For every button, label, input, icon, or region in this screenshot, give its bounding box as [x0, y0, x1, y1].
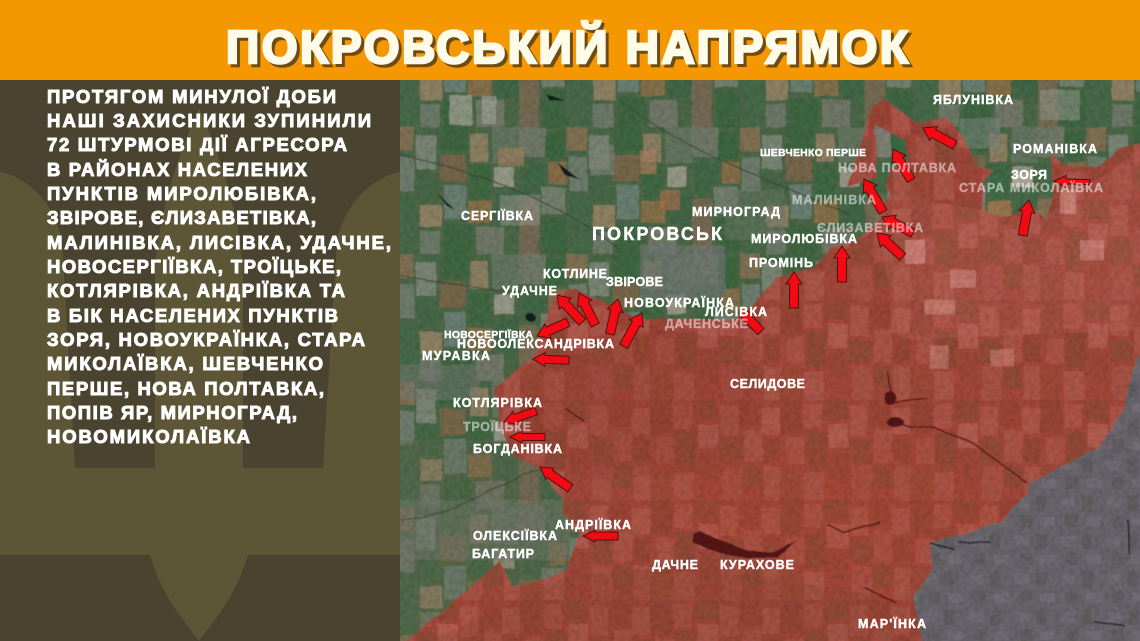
rivers on base: [400, 100, 850, 520]
body text: МАЛИНІВКА, ЛИСІВКА, УДАЧНЕ,: [47, 232, 391, 253]
label: Selydove: СЕЛИДОВЕ: [730, 377, 805, 391]
arrow: Yelyzavetivka south: [872, 227, 908, 263]
green pocket near Stara Mykolaivka: [983, 172, 1053, 220]
label: Novoserhiivka: НОВОСЕРГІЇВКА: [444, 328, 533, 341]
map base: satellite fields: [395, 75, 1140, 641]
body text: [47, 86, 391, 447]
label: Dachenske: ДАЧЕНСЬКЕ: [665, 317, 748, 331]
label: Novoukrainka: НОВОУКРАЇНКА: [624, 295, 734, 310]
label: Dachne: ДАЧНЕ: [652, 558, 698, 572]
trident emblem: [0, 108, 400, 641]
label: Marinka: МАР'ЇНКА: [858, 616, 926, 631]
label: Kurakhove: КУРАХОВЕ: [720, 558, 794, 572]
body text: ПОПІВ ЯР, МИРНОГРАД,: [47, 402, 297, 423]
arrow: Bohdanivka: [536, 461, 574, 494]
body text: ЗОРЯ, НОВОУКРАЇНКА, СТАРА: [47, 329, 365, 350]
label: Kotliarivka: КОТЛЯРІВКА: [453, 396, 542, 410]
label: Muravka: МУРАВКА: [422, 349, 490, 363]
label: Zvirove: ЗВІРОВЕ: [606, 275, 663, 289]
body text: ПУНКТІВ МИРОЛЮБІВКА,: [47, 183, 316, 204]
label: Yelyzavetivka: ЄЛИЗАВЕТІВКА: [817, 221, 923, 235]
arrow: Zvirove: [602, 297, 626, 336]
label: Stara Mykolaivka: СТАРА МИКОЛАЇВКА: [959, 180, 1103, 195]
arrow: Malynivka: [857, 175, 890, 216]
arrow: Stara Mykolaivka: [1054, 175, 1090, 188]
arrow: Novoukrainka: [617, 309, 649, 350]
body text: ПЕРШЕ, НОВА ПОЛТАВКА,: [47, 378, 324, 399]
arrow: Udachne: [551, 290, 588, 328]
terrain grain: [400, 80, 1140, 641]
arrow: Kotlyne: [572, 289, 602, 329]
left panel background: [0, 80, 400, 641]
arrow: Andriivka: [583, 530, 618, 542]
title: ПОКРОВСЬКИЙ НАПРЯМОК: [226, 21, 909, 73]
arrow: Kotliarivka: [502, 404, 538, 429]
label: Kotlyne: КОТЛИНЕ: [543, 267, 607, 281]
body text: ПРОТЯГОМ МИНУЛОЇ ДОБИ: [47, 86, 336, 107]
body text: НОВОМИКОЛАЇВКА: [47, 426, 250, 447]
label: Myroliubivka: МИРОЛЮБІВКА: [751, 232, 857, 246]
label: Troitske: ТРОЇЦЬКЕ: [463, 419, 531, 434]
label: Lysivka: ЛИСІВКА: [705, 305, 767, 319]
body text: КОТЛЯРІВКА, АНДРІЇВКА ТА: [47, 280, 345, 301]
map labels: [422, 93, 1103, 631]
arrow: Nova Poltavka: [886, 145, 918, 184]
label: Bohdanivka: БОГДАНІВКА: [473, 442, 562, 456]
body text: 72 ШТУРМОВІ ДІЇ АГРЕСОРА: [47, 134, 347, 155]
label: Oleksiivka: ОЛЕКСІЇВКА: [473, 528, 557, 543]
label: Yablunivka: ЯБЛУНІВКА: [933, 93, 1013, 107]
map: [395, 75, 1140, 641]
header bar: [0, 0, 1140, 80]
body text: В БІК НАСЕЛЕНИХ ПУНКТІВ: [47, 305, 338, 326]
red tone variation: [430, 150, 1140, 641]
label: Udachne: УДАЧНЕ: [502, 284, 557, 298]
urban gray area: [913, 345, 1140, 641]
lakes in red zone: [884, 391, 904, 427]
ravines in gray zone: [930, 520, 1130, 626]
arrow: Novooleksandrivka: [533, 352, 569, 367]
map terrain: [395, 75, 1140, 641]
arrow: Myroliubivka: [834, 246, 850, 282]
label: Zoria: ЗОРЯ: [1011, 168, 1047, 182]
label: Novooleksandrivka: НОВООЛЕКСАНДРІВКА: [457, 337, 614, 351]
arrow: Lysivka: [734, 304, 767, 337]
label: Romanivka: РОМАНІВКА: [1013, 142, 1097, 156]
body text: НОВОСЕРГІЇВКА, ТРОЇЦЬКЕ,: [47, 256, 341, 277]
label: Promin: ПРОМІНЬ: [749, 256, 813, 270]
label: Andriivka: АНДРІЇВКА: [555, 517, 631, 532]
occupied territory: red overlay: [400, 100, 1140, 641]
arrow: Novoserhiivka: [534, 315, 571, 343]
reservoir Kurakhove: [693, 531, 797, 558]
arrow: Zoria: [1015, 199, 1037, 237]
lakes on base: [437, 95, 580, 322]
green pockets near Nova Poltavka: [875, 125, 908, 190]
title: ПОКРОВСЬКИЙ НАПРЯМОК: [229, 24, 912, 76]
body text: В РАЙОНАХ НАСЕЛЕНИХ: [47, 159, 308, 180]
label: Shevchenko Pershe: ШЕВЧЕНКО ПЕРШЕ: [760, 147, 866, 159]
label: Myrnohrad: МИРНОГРАД: [692, 205, 780, 219]
label: Pokrovsk: ПОКРОВСЬК: [592, 224, 723, 244]
arrow: Troitske: [510, 431, 545, 443]
body text: ЗВІРОВЕ, ЄЛИЗАВЕТІВКА,: [47, 207, 316, 228]
label: Malynivka: МАЛИНІВКА: [792, 193, 876, 207]
arrow: Yelyzavetivka east: [878, 210, 917, 240]
arrow: Promin: [786, 272, 802, 308]
body text: НАШІ ЗАХИСНИКИ ЗУПИНИЛИ: [47, 110, 371, 131]
arrows: [502, 121, 1090, 542]
body text: МИКОЛАЇВКА, ШЕВЧЕНКО: [47, 353, 323, 374]
label: Nova Poltavka: НОВА ПОЛТАВКА: [838, 161, 956, 175]
label: Serhiivka: СЕРГІЇВКА: [461, 208, 533, 223]
label: Bahatyr: БАГАТИР: [472, 547, 534, 561]
ravines in red zone: [565, 372, 1027, 603]
arrow: Yablunivka: [919, 121, 959, 152]
